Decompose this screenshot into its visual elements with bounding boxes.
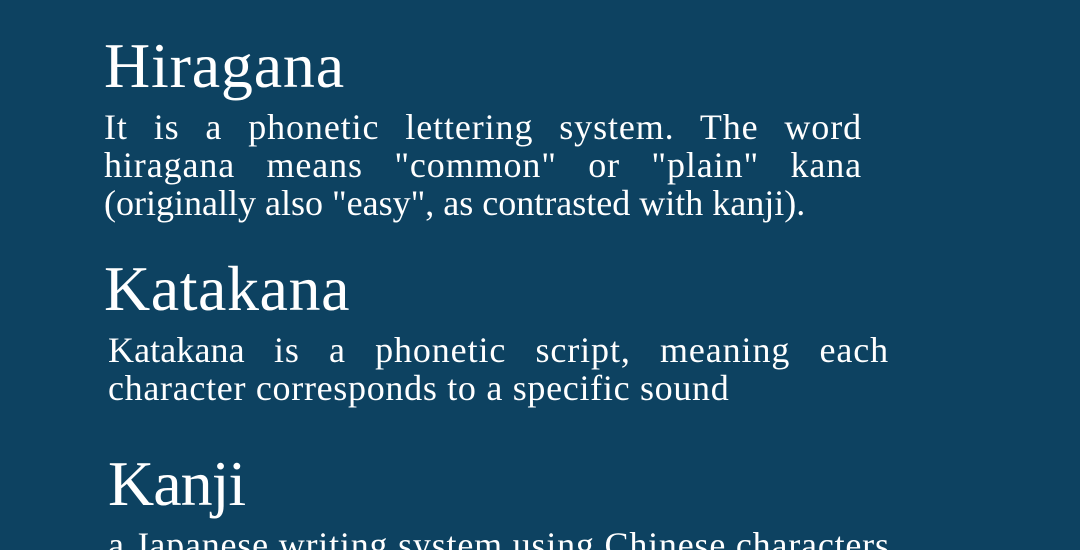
heading: Katakana: Katakana	[104, 253, 350, 324]
heading: Kanji: Kanji	[108, 448, 245, 519]
text block: Hiragana description: (originally also "easy", as contrasted with kanji).	[104, 183, 805, 223]
text block: Hiragana description: It is a phonetic lettering system. The word	[104, 107, 862, 147]
text block: Katakana description	[108, 330, 889, 408]
text block: Katakana description: character corresponds to a specific sound	[108, 368, 729, 408]
heading: Hiragana: Hiragana	[104, 30, 345, 101]
text block: Katakana description: Katakana is a phonetic script, meaning each	[108, 330, 889, 370]
text block: Hiragana description	[104, 107, 862, 223]
text block: Hiragana description: hiragana means "common" or "plain" kana	[104, 145, 862, 185]
